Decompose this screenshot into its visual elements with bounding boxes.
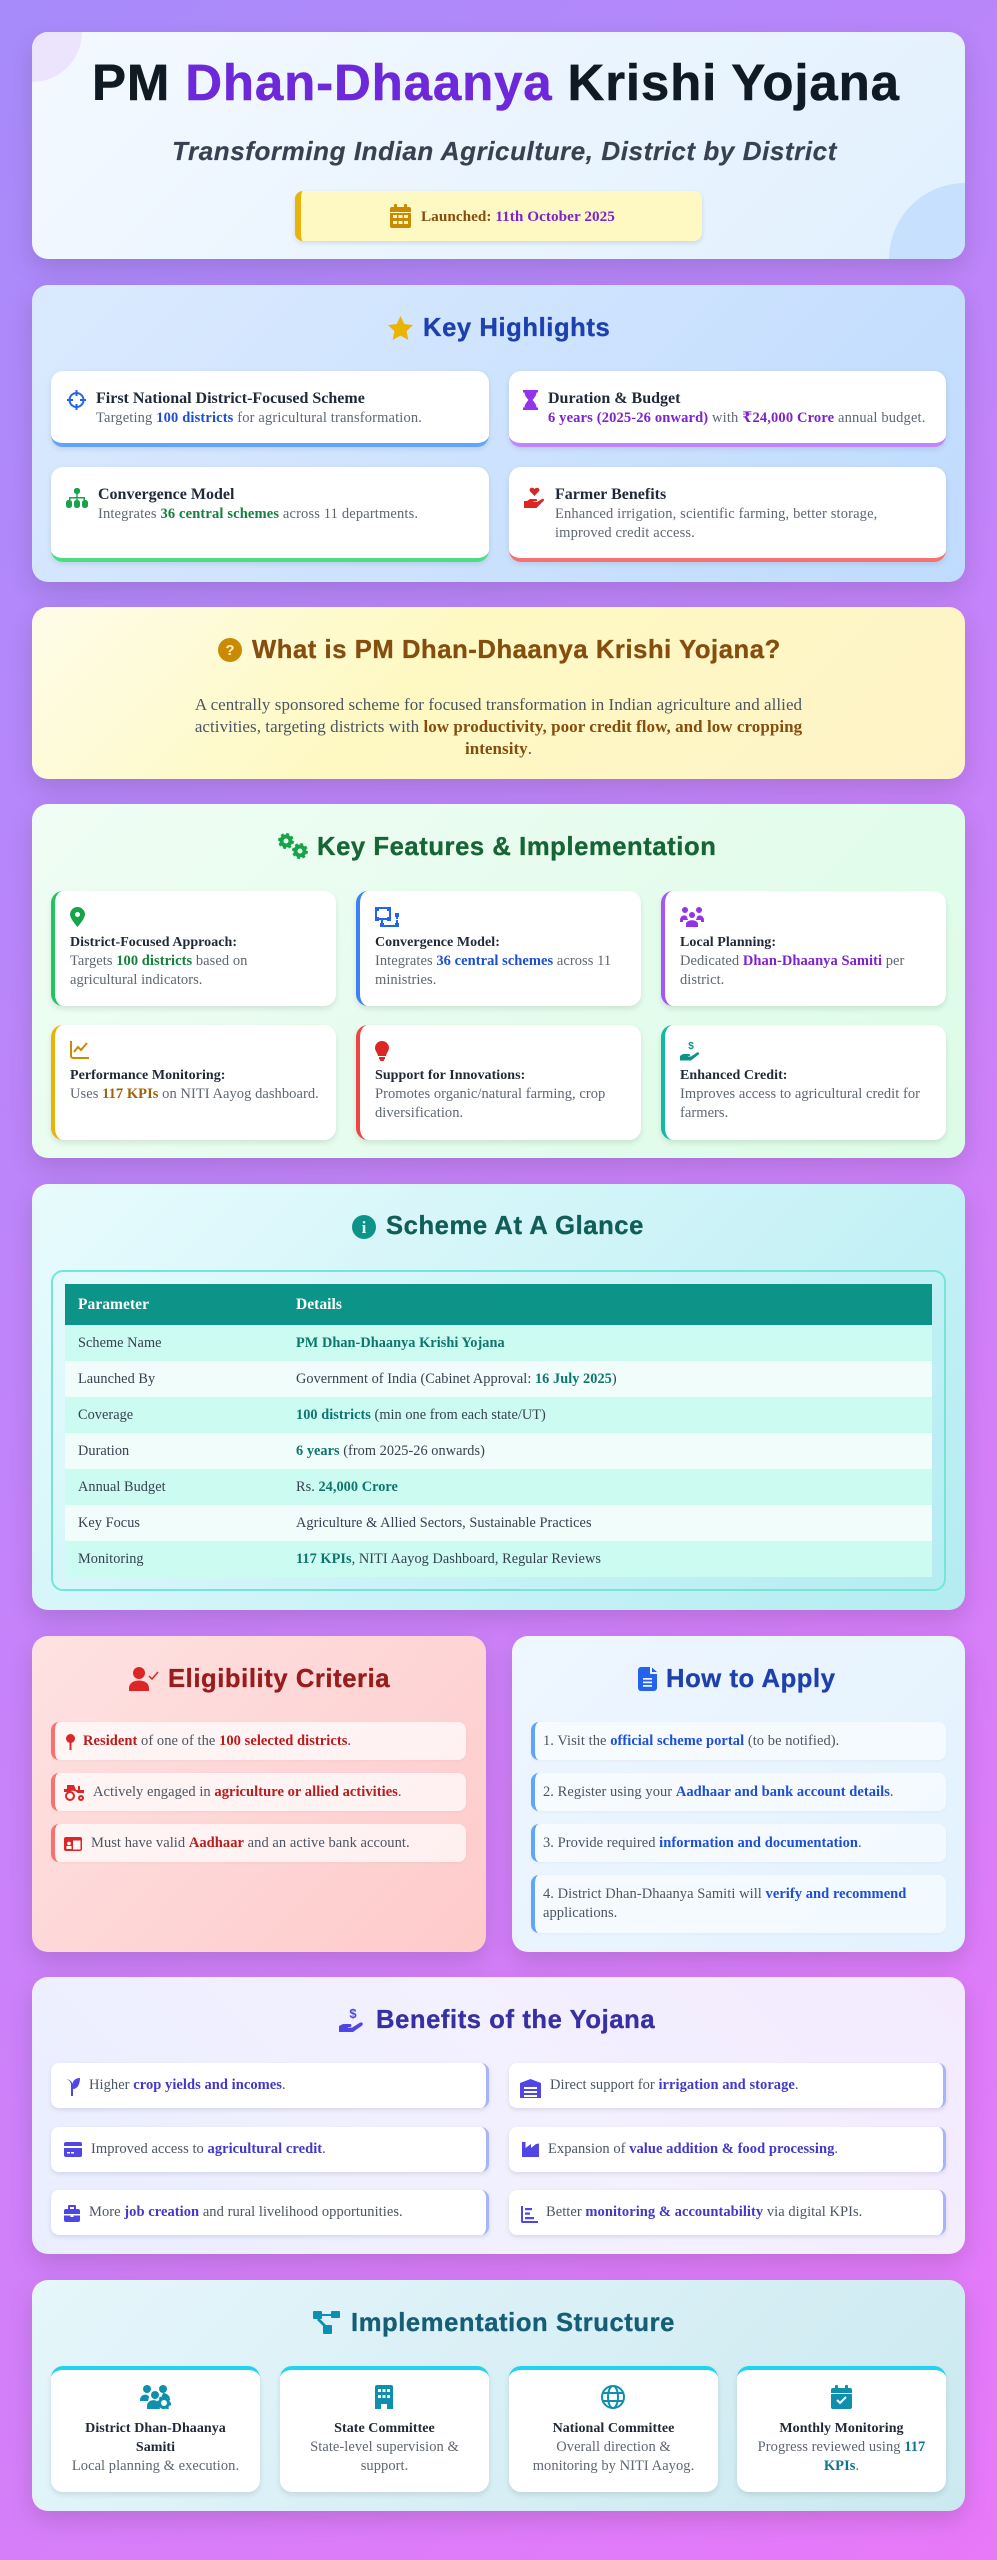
icon: hand holding dollar (339, 2008, 367, 2032)
icon: star (388, 316, 413, 340)
card text: Support for Innovations: (375, 1068, 525, 1083)
item: agriculture (51, 1773, 466, 1811)
icon: document (638, 1667, 657, 1691)
panel: what is the scheme (32, 607, 965, 779)
heading text: Benefits of the Yojana (376, 2006, 655, 2034)
icon: info circle: i (362, 1218, 367, 1237)
panel: key features and implementation (32, 804, 965, 1158)
icon: question circle (218, 638, 242, 662)
card text: First National District-Focused Scheme (96, 390, 365, 407)
icon: map pin (66, 1734, 75, 1750)
card text (70, 935, 248, 988)
description (195, 695, 802, 758)
icon: hourglass (523, 390, 538, 410)
card text: Local planning & execution. (72, 2458, 239, 2474)
benefit text: Better monitoring & accountability via digital KPIs. (546, 2204, 862, 2220)
step text: 4. District Dhan-Dhaanya Samiti will verify and recommend (543, 1886, 906, 1902)
card text: 6 years (2025-26 onward) with ₹24,000 Crore annual budget. (548, 410, 926, 426)
data table: Rs. 24,000 Crore (296, 1479, 398, 1495)
launch date badge (295, 191, 702, 241)
heading text: Key Highlights (423, 314, 610, 342)
card text: Enhanced irrigation, scientific farming, better storage, (555, 506, 877, 522)
step text: 3. Provide required information and documentation. (543, 1835, 862, 1851)
step text: 1. Visit the official scheme portal (to be notified). (543, 1733, 839, 1749)
card: enhanced credit (661, 1025, 946, 1140)
heading: key features (278, 833, 716, 861)
heading: what is (218, 636, 781, 664)
item: resident (51, 1722, 466, 1760)
icon: calendar (390, 204, 411, 228)
icon: diagram (375, 907, 399, 927)
card: duration and budget (509, 371, 946, 447)
icon: info circle (352, 1215, 376, 1239)
icon: crosshairs (67, 390, 86, 410)
card text (548, 390, 926, 426)
data table: Monitoring (78, 1551, 144, 1567)
subtitle: Transforming Indian Agriculture, District by District (172, 136, 837, 166)
icon: id card (64, 1837, 82, 1851)
icon: gears (278, 833, 308, 859)
card: district focused approach (51, 891, 336, 1006)
heading text: What is PM Dhan-Dhaanya Krishi Yojana? (252, 636, 781, 664)
icon: building (375, 2385, 393, 2409)
data table: Duration (78, 1443, 129, 1459)
benefit text: Higher crop yields and incomes. (89, 2077, 286, 2093)
card text: monitoring by NITI Aayog. (533, 2458, 694, 2474)
icon: briefcase (64, 2205, 80, 2222)
data table: 117 KPIs, NITI Aayog Dashboard, Regular Reviews (296, 1551, 601, 1567)
icon: users gear (140, 2385, 171, 2409)
icon: user check (129, 1667, 158, 1691)
step text (543, 1885, 906, 1923)
heading text: How to Apply (666, 1665, 836, 1693)
step 4 (531, 1875, 946, 1933)
heading: key highlights (388, 314, 610, 342)
panel: eligibility criteria (32, 1636, 486, 1952)
decorative corner circle top left (0, 0, 82, 82)
panel: scheme at a glance (32, 1184, 965, 1610)
icon: light bulb (375, 1041, 389, 1061)
data table: Scheme Name (78, 1335, 162, 1351)
icon: bar chart (521, 2206, 538, 2223)
item text: Must have valid Aadhaar and an active bank account. (91, 1835, 410, 1851)
icon: question circle: ? (225, 642, 235, 659)
launch date text: Launched: 11th October 2025 (421, 208, 615, 225)
item text: Actively engaged in agriculture or allied activities. (93, 1784, 402, 1800)
heading text: Scheme At A Glance (386, 1212, 644, 1240)
panel: key highlights (32, 285, 965, 582)
card text (280, 2419, 489, 2476)
item text: Resident of one of the 100 selected districts. (83, 1733, 351, 1749)
benefit text: Expansion of value addition & food processing. (548, 2141, 838, 2157)
icon: warehouse (520, 2079, 541, 2098)
card text: Dedicated Dhan-Dhaanya Samiti per (680, 953, 904, 969)
data table: Parameter (78, 1296, 149, 1313)
icon: hand holding dollar (680, 1041, 700, 1060)
card text: district. (680, 972, 724, 988)
card text: Duration & Budget (548, 390, 680, 407)
card text: Promotes organic/natural farming, crop (375, 1086, 605, 1102)
title: PM Dhan-Dhaanya Krishi Yojana (92, 54, 900, 111)
panel: benefits of the yojana (32, 1977, 965, 2254)
card text: Enhanced Credit: (680, 1068, 788, 1083)
card text: Targets 100 districts based on (70, 953, 247, 969)
benefit: monitoring (509, 2190, 946, 2235)
description: activities, targeting districts with low productivity, poor credit flow, and low cropping (195, 717, 802, 736)
icon: globe (601, 2385, 625, 2409)
panel: hero header (32, 32, 965, 259)
icon: hand holding dollar: $ (688, 1041, 694, 1052)
panel: implementation structure (32, 2280, 965, 2511)
card: district samiti (51, 2366, 260, 2492)
data table: 100 districts (min one from each state/UT) (296, 1407, 546, 1423)
card text: diversification. (375, 1105, 463, 1121)
card text: Farmer Benefits (555, 486, 666, 503)
card text (375, 935, 611, 988)
heading text: Key Features & Implementation (317, 833, 716, 861)
card text (680, 935, 904, 988)
card text: State Committee (334, 2421, 435, 2436)
card text: Targeting 100 districts for agricultural transformation. (96, 410, 422, 426)
heading: how to apply (638, 1664, 848, 1694)
data table: Details (296, 1296, 342, 1313)
card text (51, 2419, 260, 2476)
card text (96, 390, 422, 426)
card: first national scheme (51, 371, 489, 447)
card text: farmers. (680, 1105, 728, 1121)
table wrapper (51, 1270, 946, 1591)
icon: industry (522, 2142, 539, 2157)
benefit: irrigation (509, 2063, 946, 2108)
card: performance monitoring (51, 1025, 336, 1140)
card text: agricultural indicators. (70, 972, 202, 988)
card: convergence model (51, 467, 489, 562)
step 3 (531, 1824, 946, 1862)
card text: Overall direction & (556, 2439, 671, 2455)
card text: ministries. (375, 972, 436, 988)
benefit: job creation (51, 2190, 489, 2235)
step text: 2. Register using your Aadhaar and bank account details. (543, 1784, 894, 1800)
data table: Annual Budget (78, 1479, 166, 1495)
step 1 (531, 1722, 946, 1760)
card text (737, 2419, 946, 2476)
card text: support. (361, 2458, 408, 2474)
card: state committee (280, 2366, 489, 2492)
icon: diagram project (313, 2311, 340, 2334)
card text: National Committee (553, 2421, 674, 2436)
card text: Integrates 36 central schemes across 11 (375, 953, 611, 969)
benefit text: More job creation and rural livelihood opportunities. (89, 2204, 403, 2220)
card text: Improves access to agricultural credit for (680, 1086, 920, 1102)
icon: calendar check (831, 2385, 852, 2409)
data table: 6 years (from 2025-26 onwards) (296, 1443, 485, 1459)
card: monthly monitoring (737, 2366, 946, 2492)
card text: KPIs. (824, 2458, 859, 2474)
benefit: credit (51, 2127, 489, 2172)
data table: PM Dhan-Dhaanya Krishi Yojana (296, 1335, 505, 1351)
description: intensity. (465, 739, 532, 758)
heading: scheme at a glance (352, 1212, 644, 1240)
card text: Progress reviewed using 117 (758, 2439, 925, 2455)
step text: applications. (543, 1905, 617, 1921)
icon: map pin (70, 907, 85, 927)
item: aadhaar (51, 1824, 466, 1862)
data table: Coverage (78, 1407, 133, 1423)
benefit text: Improved access to agricultural credit. (91, 2141, 326, 2157)
icon: tractor (64, 1785, 84, 1801)
card: support for innovations (356, 1025, 641, 1140)
card text: Samiti (136, 2440, 175, 2455)
benefit: crop yields (51, 2063, 489, 2108)
card: convergence model (356, 891, 641, 1006)
card text (555, 486, 877, 541)
heading text: Implementation Structure (351, 2309, 675, 2337)
card text: State-level supervision & (310, 2439, 459, 2455)
card text (509, 2419, 718, 2476)
icon: credit card (64, 2142, 82, 2157)
icon: people group (680, 907, 704, 927)
data table: Agriculture & Allied Sectors, Sustainable Practices (296, 1515, 592, 1531)
card text (680, 1068, 920, 1121)
data table (65, 1284, 932, 1577)
card text: Uses 117 KPIs on NITI Aayog dashboard. (70, 1086, 319, 1102)
card text (70, 1068, 319, 1102)
heading: benefits (339, 2005, 659, 2035)
icon: line chart (70, 1041, 89, 1059)
card: national committee (509, 2366, 718, 2492)
heading: implementation (313, 2308, 685, 2338)
card: local planning (661, 891, 946, 1006)
card text: Performance Monitoring: (70, 1068, 226, 1083)
card text: District-Focused Approach: (70, 935, 237, 950)
card: farmer benefits (509, 467, 946, 562)
card text: District Dhan-Dhaanya (85, 2421, 226, 2436)
card text: Integrates 36 central schemes across 11 departments. (98, 506, 418, 522)
heading: eligibility (129, 1665, 390, 1693)
icon: seedling (64, 2078, 80, 2096)
card text: Convergence Model (98, 486, 234, 503)
data table: Launched By (78, 1371, 155, 1387)
benefit: value addition (509, 2127, 946, 2172)
icon: hand holding heart (524, 488, 544, 508)
decorative corner circle bottom right (889, 183, 997, 335)
heading text: Eligibility Criteria (168, 1665, 390, 1693)
description: A centrally sponsored scheme for focused transformation in Indian agriculture and allied (195, 695, 802, 714)
card text: Local Planning: (680, 935, 776, 950)
card text: improved credit access. (555, 525, 695, 541)
data table: Key Focus (78, 1515, 140, 1531)
card text (375, 1068, 605, 1121)
panel: how to apply (512, 1636, 965, 1952)
benefit text: Direct support for irrigation and storage. (550, 2077, 799, 2093)
step 2 (531, 1773, 946, 1811)
card text: Monthly Monitoring (779, 2421, 904, 2436)
card text (98, 486, 418, 522)
icon: sitemap (66, 488, 88, 508)
card text: Convergence Model: (375, 935, 500, 950)
data table: Government of India (Cabinet Approval: 16 July 2025) (296, 1371, 617, 1387)
